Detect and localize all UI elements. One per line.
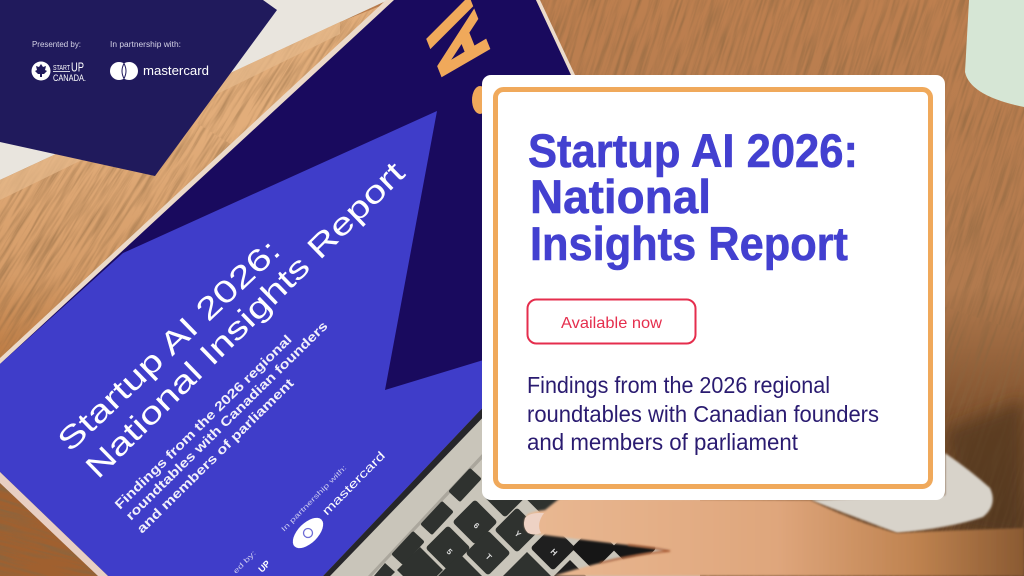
tablet partner logos: In partnership with: xyxy=(281,464,348,533)
hand on keyboard xyxy=(524,498,1024,576)
tablet title: National Insights Report xyxy=(78,154,412,485)
tablet subtitle: and members of parliament xyxy=(134,375,297,536)
heading: Startup AI 2026: xyxy=(528,125,858,178)
button: available now: Available now xyxy=(561,315,662,332)
fingernail xyxy=(524,513,544,534)
description: roundtables with Canadian founders xyxy=(527,401,879,427)
navy back cover xyxy=(0,0,575,400)
wood plank, left side xyxy=(0,0,400,365)
label: presented by: Presented by: xyxy=(32,40,81,49)
wood plank, bottom-left corner xyxy=(0,475,110,576)
title card xyxy=(482,75,945,500)
keyboard keys: 5 xyxy=(445,547,454,557)
keyboard keys: Y xyxy=(513,529,523,540)
heading xyxy=(528,125,858,271)
orange inner border xyxy=(496,90,930,486)
laptop body and keyboard xyxy=(323,400,700,576)
description xyxy=(527,372,879,455)
mouse or white object behind hand xyxy=(810,453,993,533)
heading: National xyxy=(530,171,711,224)
tablet screen showing the report xyxy=(0,0,575,576)
tablet title: Startup AI 2026: xyxy=(50,233,287,458)
coffee cup xyxy=(965,0,1024,107)
keyboard keys: T xyxy=(484,552,493,562)
cream desk surface xyxy=(0,0,388,180)
logo: Startup Canada xyxy=(32,60,86,83)
tablet subtitle xyxy=(112,318,331,536)
tablet subtitle: roundtables with Canadian founders xyxy=(123,318,331,523)
label: in partnership with: In partnership with: xyxy=(110,40,181,49)
tablet bottom-left edge xyxy=(0,472,108,576)
navy sponsor card xyxy=(0,0,277,176)
description: Findings from the 2026 regional xyxy=(527,372,830,398)
keyboard keys: H xyxy=(549,547,559,558)
heading: Insights Report xyxy=(530,218,848,271)
logo: Mastercard: mastercard xyxy=(143,63,209,78)
tablet partner logos: UP xyxy=(256,558,272,574)
logo: Startup Canada: START xyxy=(53,63,70,72)
tablet subtitle: Findings from the 2026 regional xyxy=(112,332,295,512)
tablet partner logos: ed by: xyxy=(233,550,258,575)
logo: Mastercard xyxy=(110,62,209,80)
tablet partner logos xyxy=(233,448,388,575)
blue cover xyxy=(0,111,490,576)
logo: Startup Canada: UP xyxy=(71,60,84,74)
tablet partner logos: mastercard xyxy=(319,448,388,518)
dark shadow on table at right xyxy=(945,400,1024,540)
keyboard keys: 6 xyxy=(472,521,481,531)
logo: Startup Canada: CANADA. xyxy=(53,73,86,83)
description: and members of parliament xyxy=(527,429,799,455)
tablet title xyxy=(50,154,412,485)
tablet white edge xyxy=(0,0,398,372)
button: available now xyxy=(528,300,696,344)
keyboard keys xyxy=(374,468,657,576)
